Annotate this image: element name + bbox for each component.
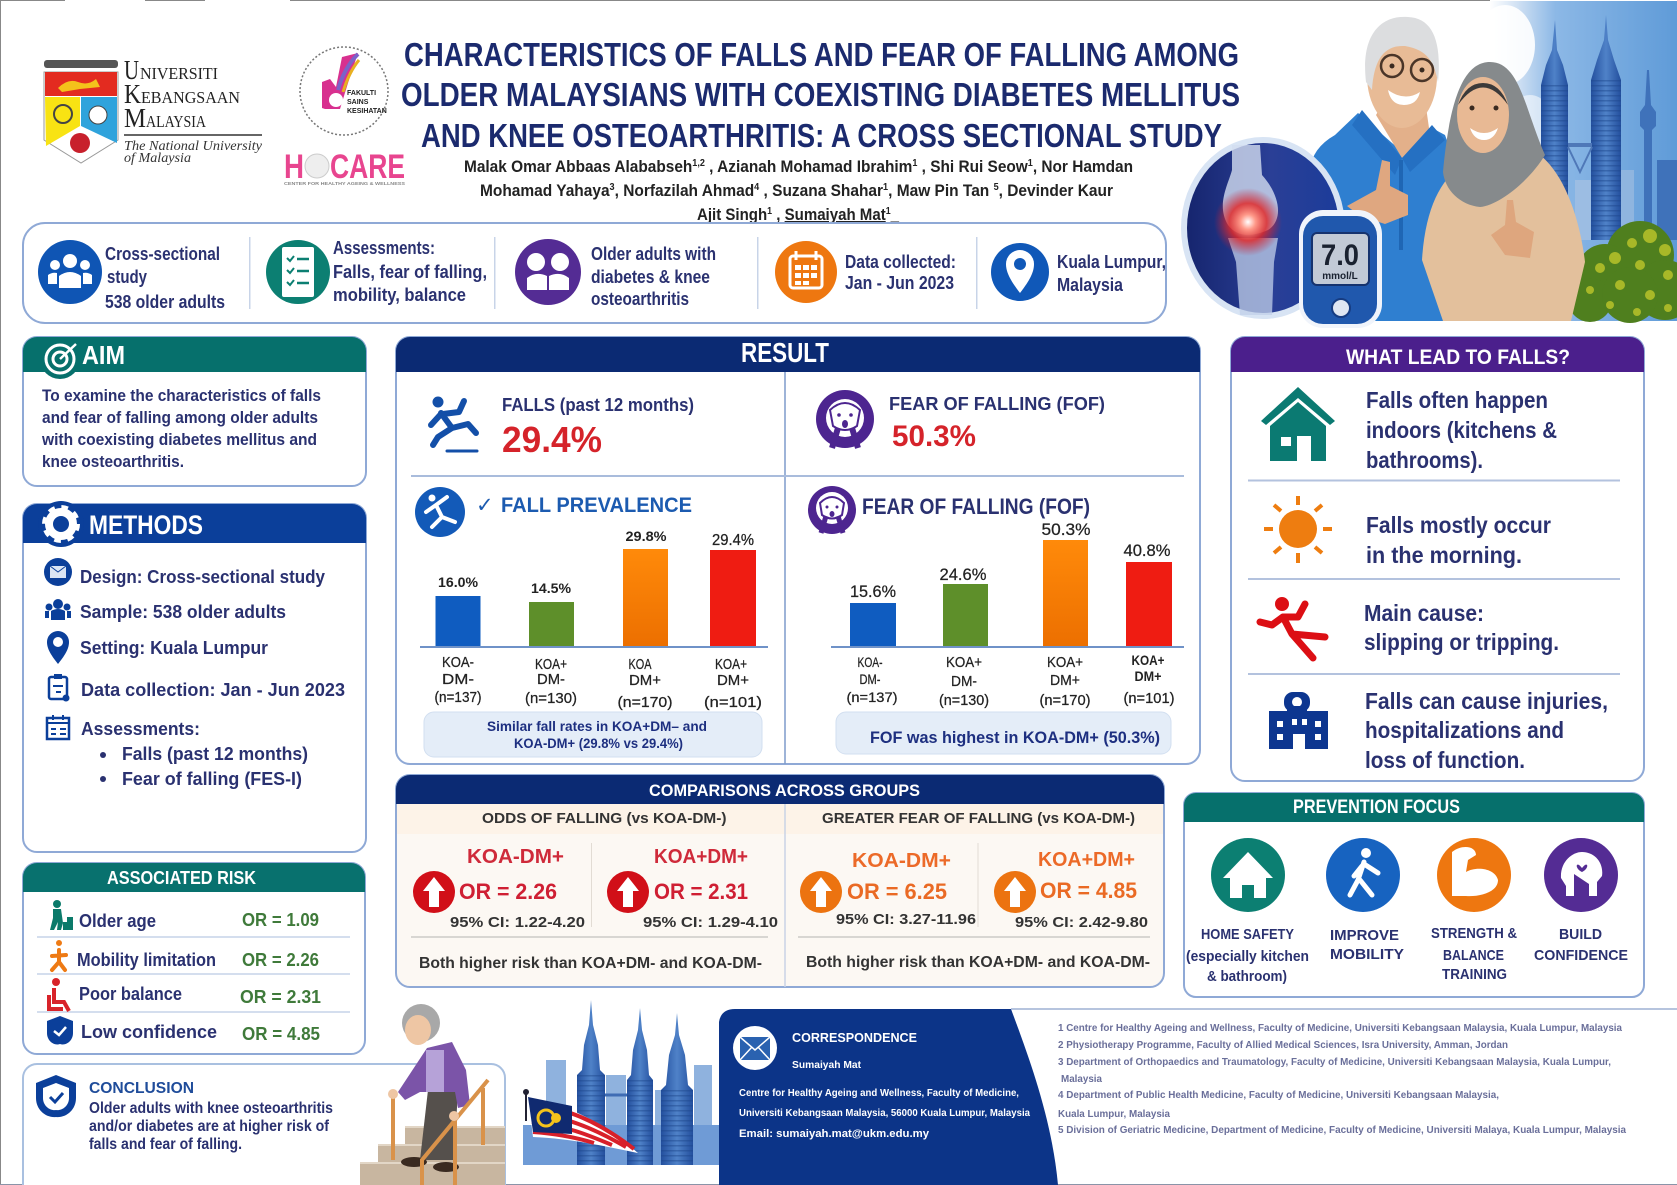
category labels: (n=170) (1040, 692, 1090, 709)
icon: gear (38, 501, 84, 547)
group: greater fear of falling: KOA+DM+ (1038, 849, 1135, 871)
value labels: 24.6% (940, 565, 986, 584)
icon: house (1261, 387, 1335, 461)
panel: associated risk: Poor balance (79, 984, 182, 1004)
text: assessments: Assessments: (333, 238, 435, 258)
group: greater fear of falling: OR = 6.25 (847, 879, 947, 904)
panel: correspondence: Sumaiyah Mat (792, 1060, 862, 1071)
panel: what lead to falls: in the morning. (1366, 542, 1522, 568)
authors: 1 (886, 206, 891, 217)
panel: result: FEAR OF FALLING (FOF) (889, 394, 1105, 414)
group: odds of falling: OR = 2.26 (459, 879, 557, 904)
logo: HCARE: CARE (330, 148, 405, 186)
panel: methods: Design: Cross-sectional study (80, 567, 325, 587)
panel: methods: METHODS (89, 510, 203, 540)
text: population: osteoarthritis (591, 289, 689, 309)
panel: associated risk: ASSOCIATED RISK (107, 868, 256, 888)
authors: Mohamad Yahaya (480, 181, 622, 200)
callout: fear note: FOF was highest in KOA-DM+ (50.3%) (870, 728, 1160, 747)
panel: result: 50.3% (892, 420, 976, 453)
value labels: 16.0% (438, 574, 479, 590)
category labels: KOA+ (1047, 654, 1083, 671)
affiliations (1058, 1022, 1626, 1136)
logo: Universiti Kebangsaan Malaysia: EBANGSAAN (141, 88, 240, 107)
panel: associated risk: Older age (79, 911, 156, 931)
icon: falling person (431, 398, 477, 451)
panel: result: FALLS (past 12 months) (502, 395, 694, 415)
category labels: KOA+ (1132, 652, 1164, 668)
panel: correspondence: Centre for Healthy Ageing and Wellness, Faculty of Medicine, (739, 1088, 1019, 1099)
category labels: (n=170) (618, 694, 672, 711)
category labels: KOA+ (715, 656, 747, 673)
labels: prevention actions: STRENGTH & (1431, 925, 1517, 942)
panel: aim: AIM (82, 340, 125, 370)
category labels: (n=137) (434, 689, 482, 706)
affiliations: Kuala Lumpur, Malaysia (1058, 1108, 1170, 1120)
authors: 3 (610, 182, 615, 193)
panel: result (396, 337, 1200, 764)
illustration: KL skyline and Malaysian flag (523, 1000, 720, 1165)
authors: 4 (754, 182, 760, 193)
icon: envelope (733, 1026, 777, 1070)
panel: prevention focus (1184, 793, 1644, 997)
group: greater fear of falling: 95% CI: 2.42-9.80 (1015, 914, 1148, 931)
labels: prevention actions: IMPROVE (1330, 927, 1399, 944)
panel: correspondence (719, 1009, 1058, 1185)
glucose meter (1299, 210, 1382, 328)
category labels: DM+ (1050, 672, 1080, 689)
authors: , Nor Hamdan (1033, 157, 1133, 176)
authors: , Azianah Mohamad Ibrahim (705, 157, 912, 176)
group: odds of falling: Both higher risk than KOA+DM- and KOA-DM- (419, 955, 762, 972)
panel: what lead to falls: Falls can cause injuries, (1365, 688, 1608, 714)
text: conclusion: falls and fear of falling. (89, 1136, 242, 1153)
group: odds of falling: ODDS OF FALLING (vs KOA-DM-) (482, 810, 726, 827)
text: location (1057, 252, 1166, 295)
group: odds of falling: KOA-DM+ (467, 846, 564, 868)
group: odds of falling: 95% CI: 1.29-4.10 (643, 914, 778, 931)
panel: aim (23, 337, 366, 486)
text: data collected (845, 252, 956, 293)
logo: Universiti Kebangsaan Malaysia: M (124, 103, 146, 133)
text: conclusion: Older adults with knee osteoarthritis (89, 1100, 333, 1117)
category labels: (n=130) (525, 690, 577, 707)
icon: falling person red (1260, 598, 1325, 658)
icon: Malaysian flag (528, 1097, 638, 1153)
icon: hospital (1269, 692, 1328, 749)
icon: calendar (775, 241, 837, 303)
group: greater fear of falling: Both higher risk than KOA+DM- and KOA-DM- (806, 954, 1150, 971)
text: location: Kuala Lumpur, (1057, 252, 1166, 272)
panel: associated risk: OR = 4.85 (242, 1024, 320, 1044)
icon: older adults (515, 239, 581, 305)
value labels: 29.8% (626, 528, 667, 544)
glucose meter: 7.0 (1321, 239, 1359, 272)
title: CHARACTERISTICS OF FALLS AND FEAR OF FALLING AMONG (404, 36, 1239, 73)
authors: 5 (994, 182, 999, 193)
authors: Ajit Singh (697, 205, 776, 224)
affiliations: Malaysia (1061, 1073, 1102, 1085)
text: assessments (333, 238, 487, 305)
category labels: (n=101) (704, 694, 762, 711)
logo: Fakulti Sains Kesihatan: KESIHATAN (347, 108, 387, 115)
category labels: KOA+ (946, 654, 982, 671)
category labels: DM- (442, 671, 474, 688)
icon: shield check (47, 1016, 73, 1044)
logo: Universiti Kebangsaan Malaysia: of Malaysia (124, 151, 191, 166)
icon: fear circle (808, 486, 856, 534)
authors: , Suzana Shahar (759, 181, 883, 200)
chart: fall prevalence (415, 487, 768, 757)
panel: methods: Data collection: Jan - Jun 2023 (81, 680, 345, 700)
authors: , Shi Rui Seow (917, 157, 1028, 176)
panel: methods: Setting: Kuala Lumpur (80, 638, 268, 658)
text: aim statement (41, 386, 321, 471)
text: population (591, 244, 716, 309)
panel: associated risk: Mobility limitation (77, 950, 216, 970)
category labels: KOA+ (535, 656, 567, 673)
labels: prevention actions: MOBILITY (1330, 946, 1404, 963)
icon: strength (1437, 838, 1511, 912)
icon: up arrow orange (994, 871, 1036, 913)
icon: shield (36, 1075, 76, 1117)
panel: result: RESULT (741, 337, 829, 368)
header: prevention focus (1184, 793, 1644, 822)
category labels: DM- (860, 671, 881, 687)
text: aim statement: with coexisting diabetes mellitus and (41, 430, 317, 449)
chart: fall prevalence: ✓ (476, 493, 494, 517)
group: greater fear of falling: KOA-DM+ (852, 850, 951, 872)
sky (1490, 1, 1677, 321)
callout: fall note: Similar fall rates in KOA+DM– and (487, 718, 707, 734)
icon: up arrow red (413, 871, 455, 913)
category labels: KOA (628, 656, 652, 673)
logo: Universiti Kebangsaan Malaysia: U (124, 55, 139, 85)
text: aim statement: To examine the characteristics of falls (42, 386, 321, 405)
title: AND KNEE OSTEOARTHRITIS: A CROSS SECTIONAL STUDY (421, 117, 1222, 154)
text: study design (105, 244, 225, 312)
illustration: older woman on stairs (360, 1004, 505, 1185)
category labels: KOA- (858, 654, 883, 670)
category labels: (n=101) (1124, 690, 1174, 707)
panel: what lead to falls: hospitalizations and (1365, 717, 1564, 743)
authors: , (772, 205, 785, 224)
study facts strip (23, 223, 1166, 323)
affiliations: 1 Centre for Healthy Ageing and Wellness, Faculty of Medicine, Universiti Kebangsaan Malaysia, Kuala Lumpur, Malaysia (1058, 1022, 1622, 1034)
icon: up arrow orange (800, 871, 842, 913)
labels: prevention actions: BUILD (1559, 926, 1602, 943)
icon: group of people (38, 240, 102, 304)
callout: fall note (424, 712, 762, 757)
knee circle (1181, 137, 1345, 319)
logo: Fakulti Sains Kesihatan (300, 47, 388, 135)
header: methods (23, 504, 366, 543)
text: data collected: Jan - Jun 2023 (845, 273, 954, 293)
trees (1568, 221, 1677, 323)
panel: what lead to falls: Falls mostly occur (1366, 512, 1551, 538)
panel: methods: Assessments: (81, 719, 200, 739)
labels: prevention actions: (especially kitchen (1186, 948, 1309, 965)
header: comparisons (396, 775, 1164, 804)
category labels: DM+ (629, 672, 661, 689)
logo: HCARE: CENTER FOR HEALTHY AGEING & WELLNESS (284, 181, 405, 186)
logo: HCARE: H (284, 148, 304, 186)
title (401, 36, 1240, 154)
icon: sun (1264, 496, 1332, 563)
category labels: DM+ (717, 672, 749, 689)
bars (831, 540, 1184, 648)
panel: correspondence: Universiti Kebangsaan Malaysia, 56000 Kuala Lumpur, Malaysia (739, 1108, 1030, 1119)
text: location: Malaysia (1057, 275, 1124, 295)
text: assessments: Falls, fear of falling, (333, 262, 487, 282)
category labels: DM+ (1134, 668, 1162, 684)
category labels (434, 654, 762, 711)
text: population: diabetes & knee (591, 267, 710, 287)
text: data collected: Data collected: (845, 252, 956, 272)
labels: prevention actions: TRAINING (1442, 966, 1507, 983)
authors: , Devinder Kaur (999, 181, 1113, 200)
icon: clipboard (49, 674, 70, 702)
header: aim (23, 337, 366, 372)
chart: fear of falling (808, 486, 1184, 754)
header: what lead to falls (1231, 337, 1644, 372)
labels: prevention actions: & bathroom) (1207, 968, 1287, 985)
authors: , Maw Pin Tan (888, 181, 994, 200)
group: odds of falling (413, 810, 778, 972)
panel: comparisons across groups: COMPARISONS ACROSS GROUPS (649, 781, 920, 800)
text: study design: study (107, 267, 147, 287)
panel: methods: Sample: 538 older adults (80, 602, 286, 622)
labels: prevention actions: HOME SAFETY (1201, 926, 1294, 943)
category labels: (n=137) (846, 689, 898, 705)
panel: what lead to falls: loss of function. (1365, 747, 1525, 773)
value labels: 15.6% (850, 582, 896, 601)
panel: prevention focus: PREVENTION FOCUS (1293, 797, 1460, 818)
authors: 1 (1028, 158, 1033, 169)
value labels (438, 528, 754, 596)
hero illustration: older couple, skyline, knee and glucose meter (1181, 1, 1677, 328)
panel: what lead to falls: bathrooms). (1366, 447, 1483, 473)
panel: associated risk: OR = 2.26 (242, 950, 319, 970)
icon: target (40, 339, 80, 379)
authors (464, 157, 1133, 224)
icon: pin (47, 631, 69, 664)
category labels: KOA- (442, 654, 474, 671)
icon: home safety (1211, 838, 1285, 912)
icon: calendar list (47, 715, 69, 739)
chart: fall prevalence: FALL PREVALENCE (501, 494, 692, 517)
text: study design: 538 older adults (105, 292, 225, 312)
panel: what lead to falls: Main cause: (1364, 600, 1484, 626)
icon: improve mobility (1326, 838, 1400, 912)
icon: up arrow red (607, 871, 649, 913)
panel: what lead to falls (1231, 337, 1644, 781)
labels: prevention actions: BALANCE (1443, 947, 1504, 964)
category labels: (n=130) (939, 692, 989, 709)
icon: UKM shield (44, 60, 118, 163)
panel: what lead to falls: WHAT LEAD TO FALLS? (1346, 346, 1570, 369)
group: greater fear of falling: 95% CI: 3.27-11.96 (836, 911, 976, 928)
panel: comparisons across groups (396, 775, 1164, 987)
icon: fearful face (816, 390, 874, 448)
icon: person on stairs (50, 900, 73, 930)
labels: prevention actions (1186, 925, 1628, 985)
affiliations: 4 Department of Public Health Medicine, Faculty of Medicine, Universiti Kebangsaan Malaysia, (1058, 1089, 1499, 1101)
icon: fall circle (415, 487, 465, 537)
authors: 1,2 (692, 158, 705, 169)
authors: Malak Omar Abbaas Alababseh (464, 157, 716, 176)
chart: fear of falling: FEAR OF FALLING (FOF) (862, 494, 1090, 519)
panel: result: 29.4% (502, 419, 602, 460)
labels: prevention actions: CONFIDENCE (1534, 947, 1628, 964)
skyline: Petronas towers and KL tower (1541, 15, 1677, 240)
value labels (850, 520, 1170, 601)
category labels (846, 652, 1174, 709)
glucose meter: mmol/L (1322, 271, 1358, 282)
callout: fear note (836, 712, 1171, 754)
affiliations: 5 Division of Geriatric Medicine, Department of Medicine, Faculty of Medicine, Universiti Malaya, Kuala Lumpur, Malaysia (1058, 1124, 1626, 1136)
woman (1422, 62, 1585, 321)
group: greater fear of falling (800, 810, 1150, 971)
panel: conclusion: CONCLUSION (89, 1080, 194, 1097)
header: result (396, 337, 1200, 372)
authors: 1 (912, 158, 918, 169)
authors: , Norfazilah Ahmad (615, 181, 754, 200)
logo: Universiti Kebangsaan Malaysia: NIVERSITI (140, 64, 218, 83)
affiliations: 2 Physiotherapy Programme, Faculty of Allied Medical Sciences, Isra University, Amman, Jordan (1058, 1039, 1508, 1051)
icon: envelope (44, 558, 72, 586)
value labels: 14.5% (531, 580, 572, 596)
text: conclusion (89, 1100, 333, 1153)
panel: what lead to falls: indoors (kitchens & (1366, 417, 1557, 443)
logo: Universiti Kebangsaan Malaysia: K (124, 79, 141, 109)
panel: associated risk: Low confidence (81, 1022, 217, 1042)
authors: 1 (883, 182, 889, 193)
text: conclusion: and/or diabetes are at higher risk of (89, 1118, 330, 1135)
panel: associated risk: OR = 1.09 (242, 910, 319, 930)
icon: location pin (991, 243, 1049, 301)
text: population: Older adults with (591, 244, 716, 264)
logo: Universiti Kebangsaan Malaysia: The National University (124, 139, 263, 154)
authors: Sumaiyah Mat (785, 205, 886, 224)
man (1310, 17, 1454, 321)
icon: walking person (52, 940, 66, 970)
value labels: 40.8% (1124, 541, 1170, 560)
group: greater fear of falling: GREATER FEAR OF FALLING (vs KOA-DM-) (822, 810, 1135, 827)
title: OLDER MALAYSIANS WITH COEXISTING DIABETES MELLITUS (401, 76, 1240, 113)
icon: person seated (49, 978, 69, 1011)
value labels: 29.4% (712, 532, 754, 549)
callout: fall note: KOA-DM+ (29.8% vs 29.4%) (514, 735, 683, 751)
text: aim statement: and fear of falling among older adults (42, 408, 318, 427)
logo: Universiti Kebangsaan Malaysia: ALAYSIA (146, 112, 207, 131)
icon: build confidence (1544, 838, 1618, 912)
list: assessments: Falls (past 12 months) (122, 744, 308, 764)
affiliations: 3 Department of Orthopaedics and Traumatology, Faculty of Medicine, Universiti Kebangsaan Malaysia, Kuala Lumpur, (1058, 1056, 1611, 1068)
panel: methods (23, 501, 366, 852)
text: assessments: mobility, balance (333, 285, 466, 305)
authors: 1 (767, 206, 772, 217)
list: assessments (100, 744, 308, 789)
panel: conclusion (23, 1064, 505, 1185)
list: assessments: Fear of falling (FES-I) (122, 769, 302, 789)
panel: correspondence: Email: sumaiyah.mat@ukm.edu.my (739, 1128, 930, 1140)
panel: correspondence: CORRESPONDENCE (792, 1030, 917, 1045)
logo: HCARE (284, 148, 405, 186)
group: odds of falling: OR = 2.31 (654, 879, 748, 904)
category labels: DM- (951, 673, 977, 690)
category labels: DM- (537, 671, 565, 688)
header: associated risk (23, 863, 365, 892)
text: study design: Cross-sectional (105, 244, 220, 264)
value labels: 50.3% (1042, 520, 1090, 539)
panel: what lead to falls: slipping or tripping. (1364, 629, 1559, 655)
logo: Fakulti Sains Kesihatan: SAINS (347, 99, 369, 106)
logo: Universiti Kebangsaan Malaysia (44, 55, 263, 166)
group: odds of falling: 95% CI: 1.22-4.20 (450, 914, 585, 931)
group: odds of falling: KOA+DM+ (654, 846, 748, 868)
logo: Fakulti Sains Kesihatan: FAKULTI (347, 90, 376, 97)
bars (420, 549, 768, 648)
icon: people (45, 599, 71, 620)
icon: clipboard checklist (266, 240, 330, 304)
panel: what lead to falls: Falls often happen (1366, 387, 1548, 413)
text: aim statement: knee osteoarthritis. (42, 452, 184, 471)
authors: _ (890, 205, 899, 224)
panel: associated risk (23, 863, 365, 1054)
group: greater fear of falling: OR = 4.85 (1040, 878, 1137, 903)
panel: associated risk: OR = 2.31 (240, 987, 321, 1007)
